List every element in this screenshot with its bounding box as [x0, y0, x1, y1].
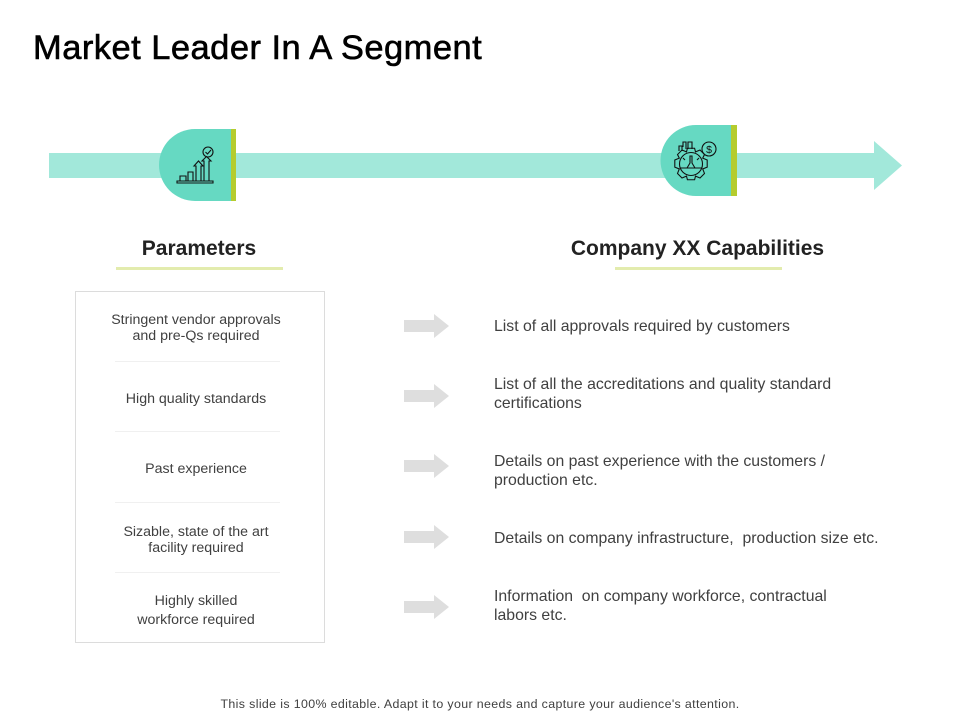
capability 2 [494, 376, 831, 412]
icon: gear with gauge and dollar: $ [706, 144, 712, 156]
badge: parameters [159, 129, 236, 201]
divider row 1 [115, 361, 280, 362]
parameter 3: Past experience [145, 461, 247, 477]
parameter 1: Stringent vendor approvals [111, 312, 281, 328]
panel: parameters list [75, 291, 325, 643]
parameter 4: Sizable, state of the art [123, 524, 269, 540]
parameter 4 [123, 524, 269, 556]
arrow 3 [404, 454, 449, 478]
capability 3 [494, 453, 825, 489]
timeline arrow [49, 141, 902, 190]
footer note: This slide is 100% editable. Adapt it to your needs and capture your audience's attention. [220, 697, 740, 711]
heading underline: parameters [116, 267, 283, 270]
parameter 5: Highly skilled [155, 593, 237, 609]
timeline arrow with icons [49, 125, 902, 201]
heading: parameters: Parameters [142, 237, 256, 260]
capability 5 [494, 588, 827, 624]
heading: capabilities: Company XX Capabilities [571, 237, 824, 260]
divider row 2 [115, 431, 280, 432]
parameter 5 [137, 593, 255, 628]
capability 4: Details on company infrastructure, production size etc. [494, 530, 879, 547]
capability 2: certifications [494, 395, 582, 412]
title: Market Leader In A Segment [33, 29, 482, 67]
parameter 1: and pre-Qs required [133, 328, 259, 344]
divider row 4 [115, 572, 280, 573]
arrow 4 [404, 525, 449, 549]
badge: capabilities [660, 125, 737, 196]
arrow 1 [404, 314, 449, 338]
divider row 3 [115, 502, 280, 503]
arrow 2 [404, 384, 449, 408]
parameter 4: facility required [148, 540, 244, 556]
capability 1: List of all approvals required by customers [494, 318, 790, 335]
capability 5: Information on company workforce, contractual [494, 588, 827, 605]
parameter 2: High quality standards [126, 391, 266, 407]
capability 3: Details on past experience with the customers / [494, 453, 825, 470]
parameter 5: workforce required [137, 612, 255, 628]
heading underline: capabilities [615, 267, 782, 270]
arrow 5 [404, 595, 449, 619]
capability 5: labors etc. [494, 607, 567, 624]
capability 2: List of all the accreditations and quality standard [494, 376, 831, 393]
icon: growth chart [177, 147, 213, 183]
capability 3: production etc. [494, 472, 598, 489]
parameter 1 [111, 312, 281, 344]
